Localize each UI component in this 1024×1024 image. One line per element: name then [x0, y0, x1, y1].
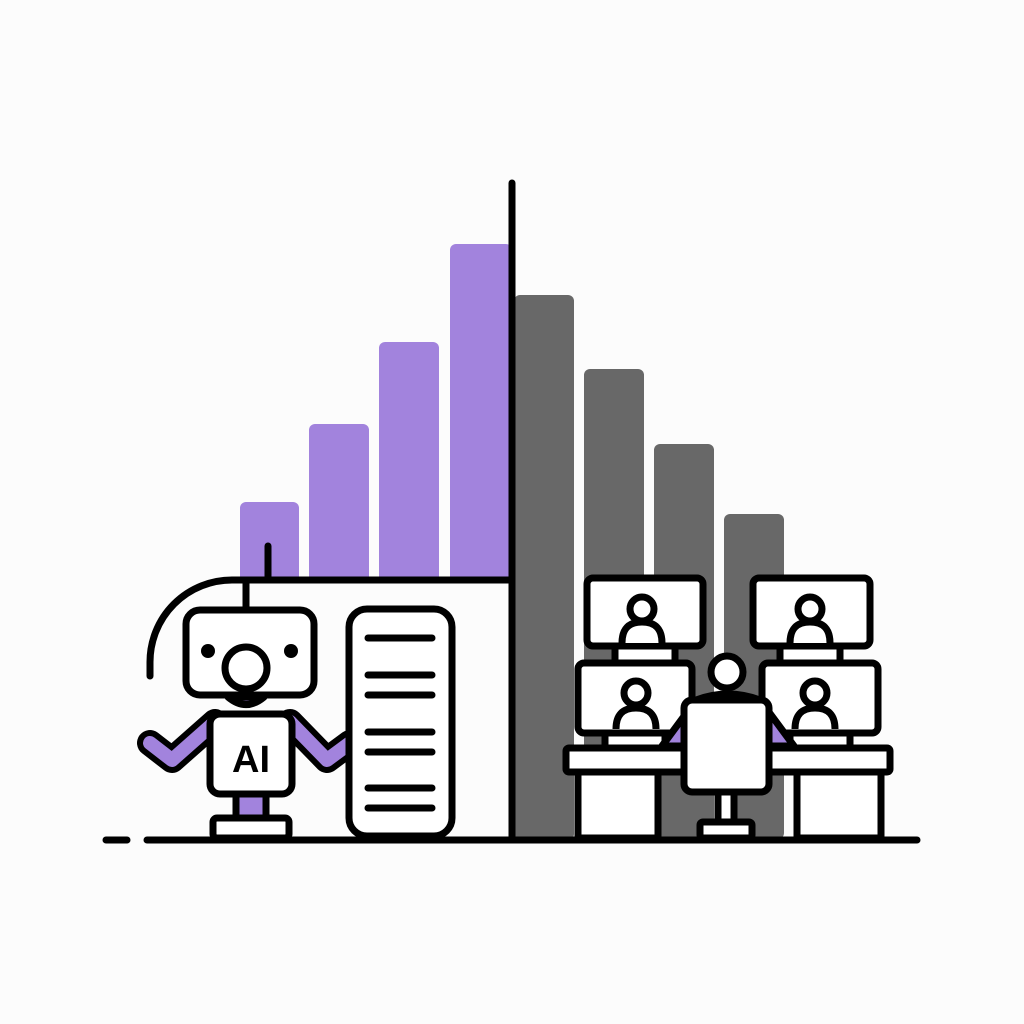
shelf line with arc: [150, 580, 512, 676]
panel: AI side background: [232, 581, 510, 838]
icon: AI robot: [150, 546, 350, 838]
bar chart: human decline (gray): [514, 295, 784, 840]
icons: people on monitors: [616, 597, 835, 729]
ground line: [106, 836, 917, 844]
icon: document: [349, 609, 452, 836]
bar chart: AI growth (purple): [240, 244, 512, 594]
robot label AI: AI: [232, 739, 270, 781]
icon: human workstation with monitors: [566, 578, 890, 838]
divider axis: [508, 183, 516, 838]
